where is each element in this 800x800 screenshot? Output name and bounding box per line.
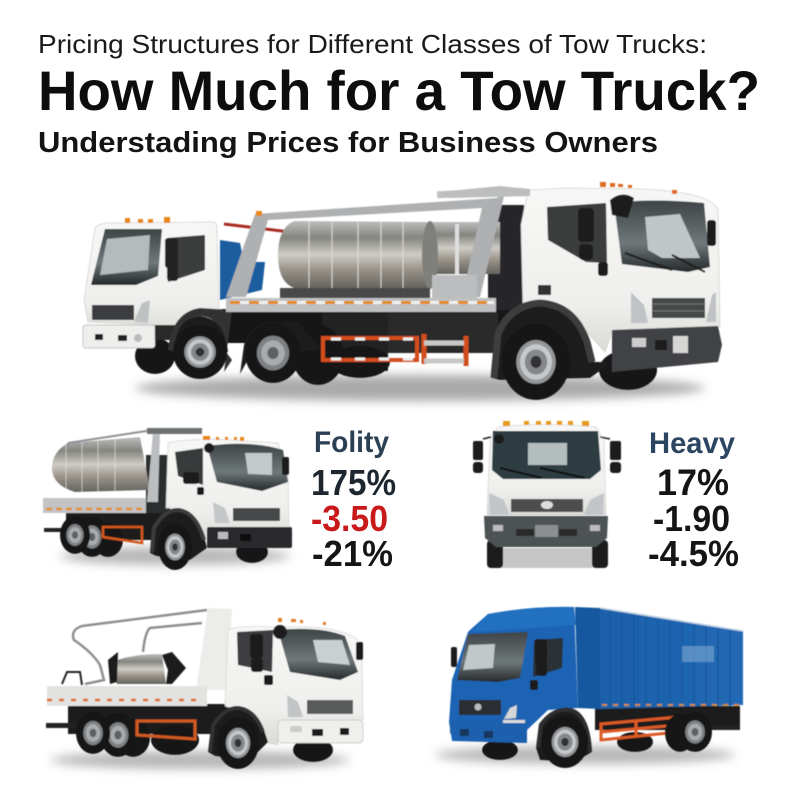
rear windshield bbox=[91, 229, 162, 285]
bumper bbox=[484, 516, 608, 547]
front windshield bbox=[614, 200, 710, 272]
front headlight bbox=[631, 292, 648, 323]
bumper bbox=[450, 721, 527, 743]
orange rack bbox=[137, 721, 195, 739]
front cab: white bbox=[521, 188, 720, 352]
small truck: silver tanker bbox=[43, 428, 292, 570]
ground shadow bbox=[50, 751, 350, 769]
equipment tank bbox=[115, 654, 166, 684]
label: Folity bbox=[314, 426, 389, 459]
grille bbox=[233, 508, 280, 521]
rear wheels bbox=[93, 523, 123, 557]
side window bbox=[175, 448, 203, 485]
blue equipment bbox=[220, 240, 265, 300]
cargo box side bbox=[600, 608, 743, 709]
mirrors bbox=[451, 639, 547, 690]
negative percent: -4.5% bbox=[648, 533, 739, 574]
side window bbox=[533, 638, 563, 677]
rear wheel bbox=[665, 714, 695, 752]
cab bbox=[449, 607, 578, 743]
cab bbox=[166, 439, 289, 540]
front wheel bbox=[502, 324, 570, 400]
cab bbox=[487, 424, 606, 515]
bed frame: top bar and uprights bbox=[226, 192, 505, 297]
cargo tank: stainless steel bbox=[278, 221, 430, 288]
headlight bbox=[213, 502, 230, 523]
rear bumper bbox=[83, 325, 155, 348]
mirrors bbox=[250, 625, 363, 685]
wheels bbox=[487, 540, 503, 568]
windshield bbox=[492, 431, 601, 479]
rear cab: white bbox=[84, 222, 219, 336]
stats: Folity bbox=[311, 426, 396, 574]
orange side rack bbox=[323, 334, 466, 366]
bumper details bbox=[312, 729, 323, 736]
front roof strip bbox=[440, 186, 530, 198]
front wheel bbox=[158, 524, 192, 570]
front mirrors bbox=[578, 194, 716, 276]
far wheel bbox=[236, 541, 268, 563]
mirrors bbox=[473, 434, 621, 473]
rear cab lights bbox=[125, 217, 170, 223]
ground shadow bbox=[435, 746, 735, 764]
front fender bbox=[492, 300, 612, 380]
grille bbox=[307, 700, 353, 714]
chassis bbox=[66, 512, 176, 540]
headlight bbox=[504, 705, 517, 719]
title line: how much: How Much for a Tow Truck? bbox=[38, 59, 760, 122]
front side window bbox=[547, 203, 607, 263]
ground shadow bbox=[135, 375, 705, 401]
flatbed bbox=[47, 686, 207, 706]
front bumper bbox=[612, 326, 722, 372]
front wheel bbox=[542, 716, 588, 768]
title bbox=[38, 29, 760, 159]
dark machinery behind cab bbox=[146, 455, 170, 513]
rear headlight bbox=[134, 300, 150, 323]
flatbed with reflector stripe bbox=[226, 298, 496, 312]
rear wheels bbox=[116, 719, 150, 757]
headlight bbox=[287, 695, 303, 717]
side window bbox=[237, 630, 273, 672]
orange rack bbox=[103, 527, 142, 543]
rear cab wheel bbox=[173, 325, 227, 379]
title line: understanding prices: Understading Prices for Business Owners bbox=[38, 127, 658, 159]
dark machinery behind cab bbox=[488, 205, 524, 310]
tank rail bbox=[68, 430, 153, 448]
rear fender bbox=[168, 308, 232, 372]
negative percent: -21% bbox=[312, 533, 393, 574]
title line: pricing structures: Pricing Structures for Different Classes of Tow Trucks: bbox=[38, 29, 707, 59]
fender bbox=[150, 508, 207, 560]
headboard bbox=[196, 608, 232, 690]
rear axle wheels bbox=[292, 325, 344, 385]
negative value: -1.90 bbox=[653, 498, 730, 539]
far wheels bbox=[135, 338, 175, 374]
orange rack bbox=[601, 717, 678, 740]
door handle bbox=[538, 285, 551, 295]
label: Heavy bbox=[649, 427, 735, 460]
rails bbox=[73, 610, 207, 684]
cargo box front bbox=[575, 607, 600, 709]
far wheel bbox=[293, 738, 333, 762]
orange lights bbox=[203, 436, 244, 441]
orange lights bbox=[278, 618, 326, 625]
small truck: flatbed with equipment bbox=[46, 608, 363, 769]
front wheel bbox=[217, 717, 259, 769]
main truck: silver tanker tow truck bbox=[83, 182, 722, 401]
rear side window bbox=[167, 235, 205, 282]
chassis bbox=[68, 704, 233, 734]
tank bbox=[52, 437, 150, 492]
grille bbox=[459, 700, 501, 715]
flatbed bbox=[43, 498, 146, 513]
headlights bbox=[489, 493, 509, 515]
percent value: 17% bbox=[657, 462, 729, 503]
chassis bbox=[222, 309, 522, 343]
windshield bbox=[207, 444, 288, 491]
mirrors bbox=[183, 443, 289, 495]
black equipment bbox=[108, 652, 186, 684]
front cab lights bbox=[600, 182, 677, 194]
windshield bbox=[278, 629, 358, 680]
small truck: blue box truck bbox=[435, 607, 743, 768]
front grille bbox=[652, 298, 705, 318]
front fender bbox=[536, 708, 592, 762]
ground shadow bbox=[490, 548, 605, 568]
orange lights bbox=[503, 421, 589, 426]
ground shadow bbox=[60, 547, 290, 565]
chassis bbox=[595, 706, 740, 730]
windshield bbox=[457, 632, 528, 682]
percent value: 175% bbox=[311, 462, 396, 503]
grille bbox=[511, 499, 583, 512]
negative value red: -3.50 bbox=[311, 498, 388, 539]
stats: Heavy bbox=[648, 427, 739, 574]
cab bbox=[225, 626, 363, 745]
fender bbox=[208, 706, 268, 760]
small truck: front view bbox=[473, 421, 621, 568]
rear grille bbox=[92, 305, 134, 320]
upright bbox=[147, 432, 160, 502]
bumper bbox=[207, 527, 292, 548]
red boom bbox=[224, 224, 290, 232]
